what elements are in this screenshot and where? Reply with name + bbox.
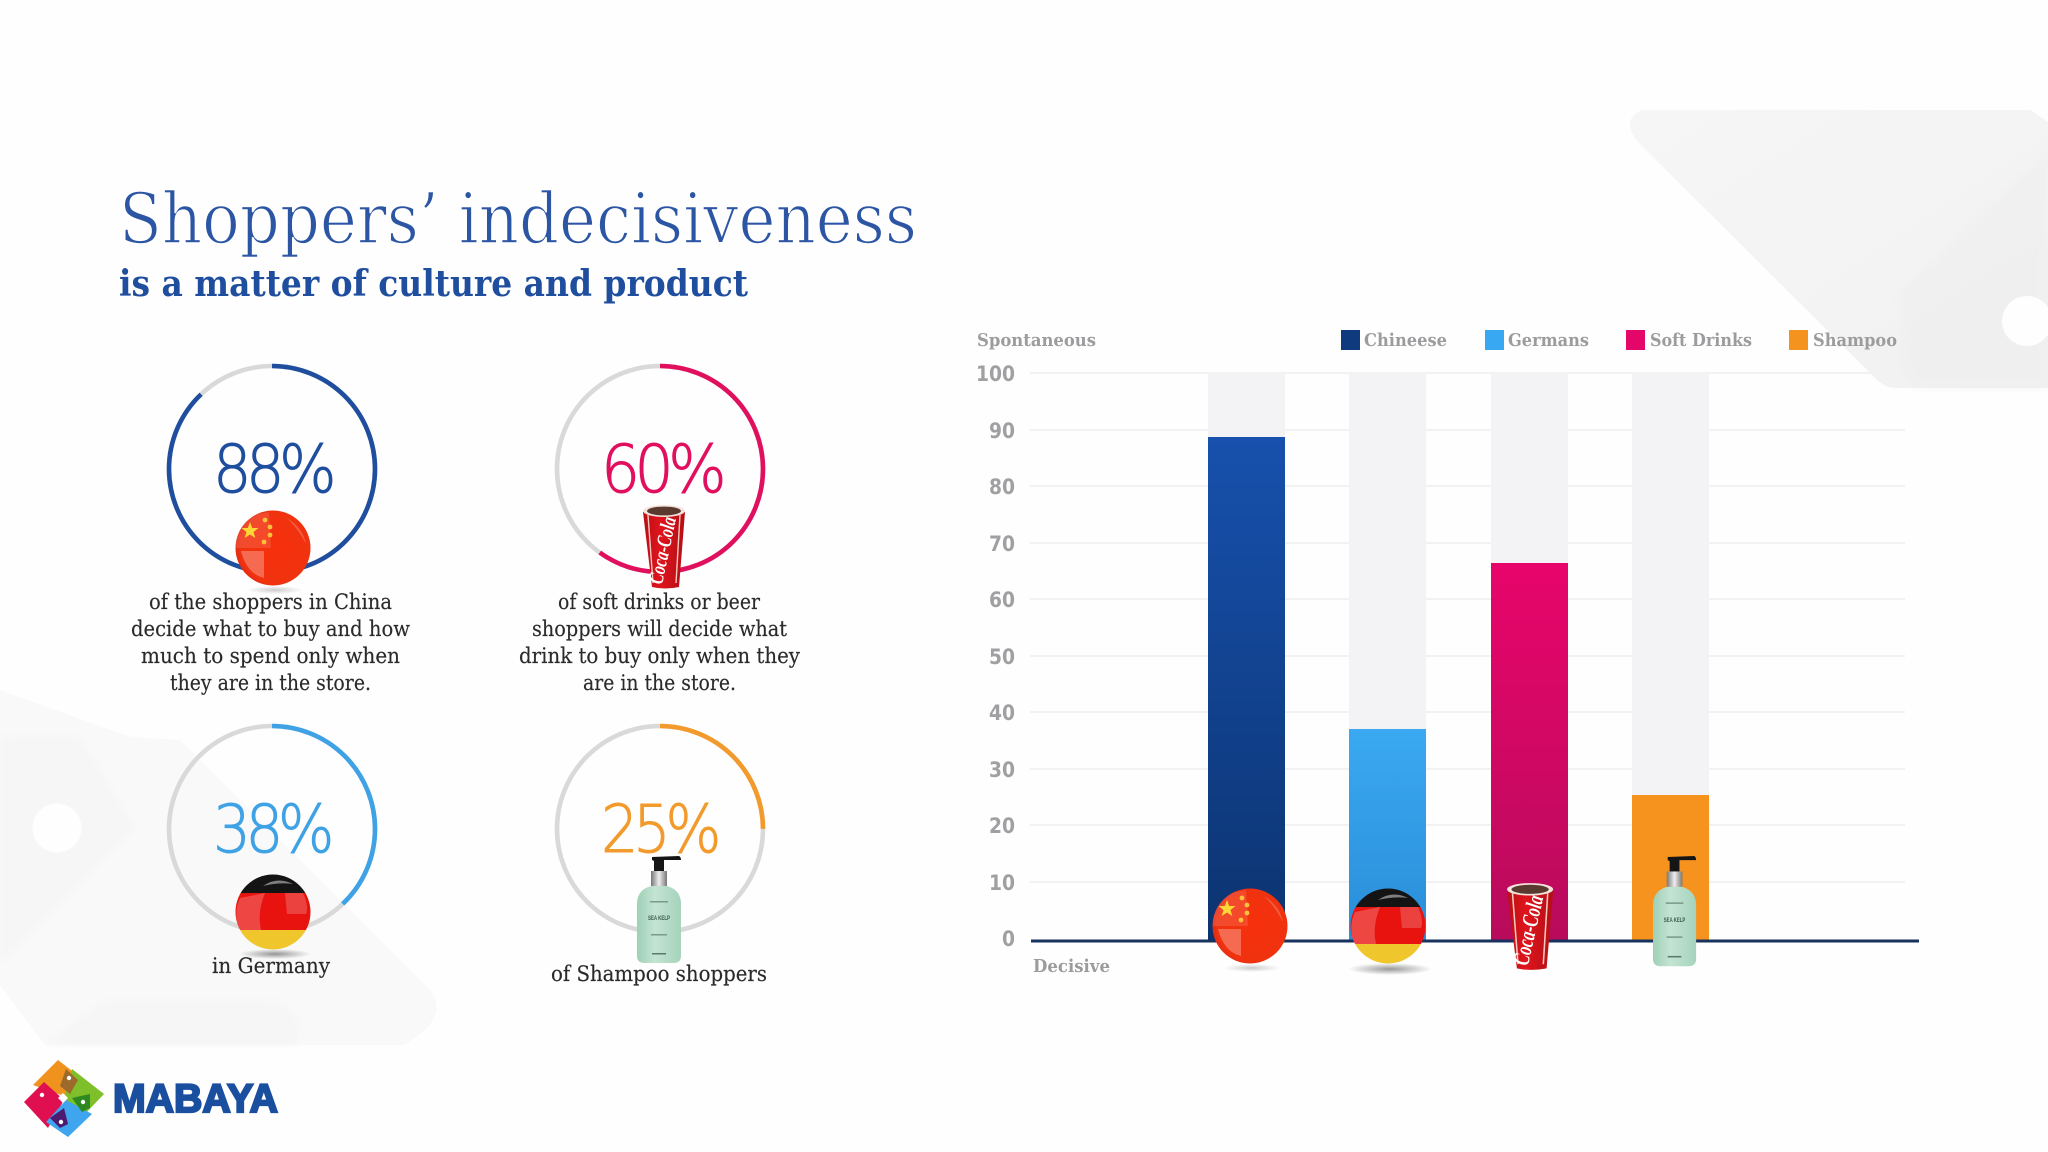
caption: China: of the shoppers in China [149,590,392,614]
y axis tick labels: 70 [989,532,1015,556]
icon: shampoo bottle on bar [1653,856,1696,966]
caption: China: decide what to buy and how [131,617,410,641]
background shape: top right [1630,110,2048,388]
y axis tick labels: 50 [989,645,1015,669]
caption: China: they are in the store. [170,671,371,695]
y axis tick labels: 90 [989,419,1015,443]
legend: Germans [1508,330,1589,351]
number 38%: 38% [213,791,330,868]
bar: Germans [1349,373,1426,941]
logo wordmark: MABAYA [113,1077,278,1121]
number 88%: 88% [213,431,332,508]
bar chart [976,330,1919,977]
y axis tick labels: 100 [976,362,1015,386]
icon: China flag on bar [1212,888,1288,972]
caption: China [131,590,410,695]
panel: China 88% [131,366,410,695]
icon: shampoo bottle on bar: SEA KELP [1664,918,1685,924]
legend [1341,330,1897,351]
icon: shampoo bottle: SEA KELP [648,916,670,922]
legend: Soft Drinks [1650,330,1752,351]
y axis tick labels: 80 [989,475,1015,499]
ring 25% [557,726,763,932]
ring 38% [169,726,375,932]
y axis tick labels: 30 [989,758,1015,782]
icon: logo diamond [24,1060,104,1137]
caption: soft drinks: shoppers will decide what [532,617,788,641]
ring 88% [169,366,375,572]
y axis tick labels: 0 [1002,927,1015,951]
bar: Chineese [1208,373,1285,941]
number 60%: 60% [601,431,722,508]
icon: Germany flag on bar [1348,888,1432,975]
y axis tick labels: 10 [989,871,1015,895]
number 25%: 25% [601,791,717,868]
icon: Germany flag sphere [235,874,311,959]
panel: shampoo 25% [551,726,767,986]
icon: cola cup on bar: Coca-Cola [1508,893,1548,967]
legend: Shampoo [1813,330,1897,351]
icon: cola cup: Coca-Cola [643,515,681,586]
panel: soft drinks 60% [519,366,800,695]
caption: soft drinks [519,590,800,695]
caption: soft drinks: drink to buy only when they [519,644,800,668]
icon: China flag sphere [236,510,310,594]
bar: Shampoo [1632,373,1709,941]
y axis tick labels: 20 [989,814,1015,838]
title: Shoppers’ indecisiveness [119,178,917,260]
legend: Chineese [1364,330,1447,351]
y axis tick labels [976,362,1015,951]
background shape: bottom left [0,690,436,1045]
logo: Mabaya [24,1060,278,1137]
ring 60% [557,366,763,572]
y axis tick labels: 40 [989,701,1015,725]
caption: soft drinks: of soft drinks or beer [558,590,761,614]
x axis label: Decisive [1033,956,1110,977]
bar: Soft Drinks [1491,373,1568,941]
panel: Germany 38% [169,726,375,978]
caption: soft drinks: are in the store. [583,671,736,695]
caption: shampoo: of Shampoo shoppers [551,962,767,986]
y axis tick labels: 60 [989,588,1015,612]
subtitle: is a matter of culture and product [119,263,748,305]
caption: China: much to spend only when [141,644,400,668]
y axis title: Spontaneous [977,330,1096,351]
icon: shampoo bottle [637,856,681,963]
caption: Germany: in Germany [212,954,330,978]
